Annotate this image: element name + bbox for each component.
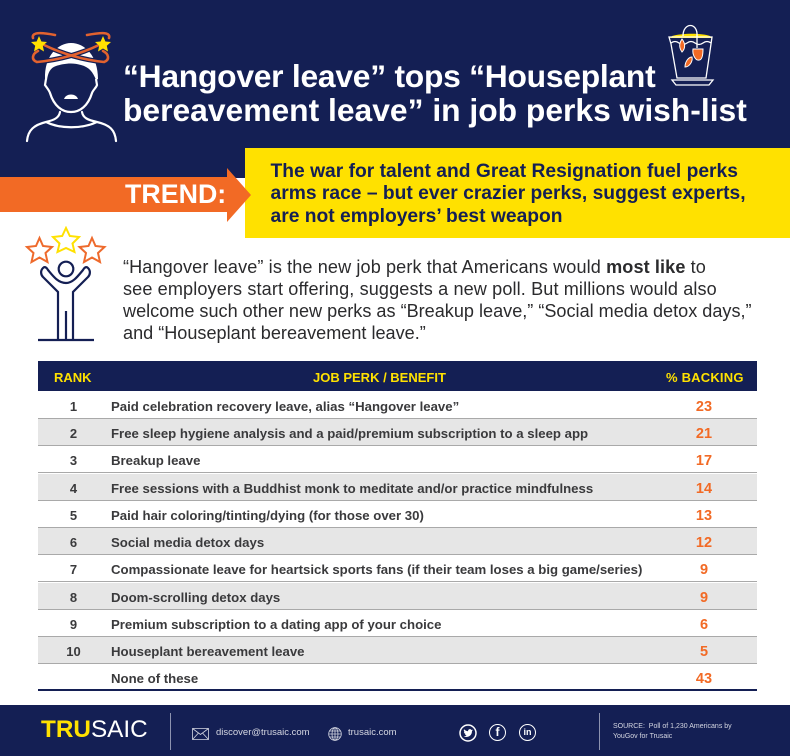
row 9 <box>38 610 757 637</box>
callout text: The war for talent and Great Resignation fuel perks <box>270 160 738 182</box>
title <box>123 58 747 128</box>
row 9: 9 <box>70 617 77 632</box>
row 4: 14 <box>696 480 712 496</box>
callout text: are not employers’ best weapon <box>270 206 563 227</box>
row 5 <box>38 501 757 528</box>
row 8: 9 <box>700 590 708 606</box>
icon: mail <box>192 728 209 740</box>
row 5: 13 <box>696 508 712 524</box>
logo: TRUSAIC <box>41 716 148 743</box>
row none: None of these <box>111 671 198 686</box>
row 8: 8 <box>70 590 77 604</box>
row 2: Free sleep hygiene analysis and a paid/premium subscription to a sleep app <box>111 426 588 441</box>
intro paragraph: see employers start offering, suggests a new poll. But millions would also <box>123 279 717 299</box>
trend label: TREND: <box>125 179 226 209</box>
row 2: 21 <box>696 426 712 442</box>
row 10: 10 <box>66 644 81 659</box>
header band <box>0 0 790 178</box>
table header: RANK <box>54 370 92 385</box>
row 1: 23 <box>696 399 712 415</box>
row 6: 12 <box>696 535 712 551</box>
row 7: 7 <box>70 562 77 577</box>
icon: twitter <box>459 724 477 742</box>
source <box>613 722 732 740</box>
row 7: Compassionate leave for heartsick sports fans (if their team loses a big game/series) <box>111 562 642 577</box>
callout text: arms race – but ever crazier perks, suggest experts, <box>270 183 746 204</box>
row 10 <box>38 637 757 664</box>
source: SOURCE: Poll of 1,230 Americans by <box>613 723 732 730</box>
row 1 <box>38 392 757 419</box>
table header: % BACKING <box>666 370 744 385</box>
icon: linkedin: in <box>524 727 532 737</box>
table header <box>38 361 757 391</box>
title: “Hangover leave” tops “Houseplant <box>123 58 655 94</box>
icon: linkedin <box>519 724 536 741</box>
row 6: Social media detox days <box>111 535 264 550</box>
row 10: Houseplant bereavement leave <box>111 644 304 659</box>
source: YouGov for Trusaic <box>613 733 672 740</box>
intro paragraph: welcome such other new perks as “Breakup leave,” “Social media detox days,” <box>123 301 752 321</box>
icon: person with stars <box>24 226 107 342</box>
intro paragraph: “Hangover leave” is the new job perk that Americans would most like to <box>123 257 706 277</box>
row 8: Doom-scrolling detox days <box>111 590 280 604</box>
row 4: Free sessions with a Buddhist monk to meditate and/or practice mindfulness <box>111 480 593 496</box>
row 4 <box>38 474 757 500</box>
row 9: Premium subscription to a dating app of your choice <box>111 617 441 632</box>
icon: dizzy person <box>26 32 118 142</box>
row 10: 5 <box>700 644 708 660</box>
row 5: Paid hair coloring/tinting/dying (for those over 30) <box>111 508 424 523</box>
row 7 <box>38 555 757 582</box>
table <box>38 361 757 691</box>
intro paragraph <box>123 257 752 343</box>
footer <box>0 705 790 756</box>
row 8 <box>38 582 757 610</box>
row 1: Paid celebration recovery leave, alias “Hangover leave” <box>111 399 459 414</box>
callout text <box>270 160 746 227</box>
icon: facebook <box>489 724 506 741</box>
trend callout <box>245 148 790 238</box>
row 9: 6 <box>700 617 708 633</box>
icon: globe <box>328 727 342 741</box>
website: trusaic.com <box>348 727 397 738</box>
row 6: 6 <box>70 535 77 550</box>
email: discover@trusaic.com <box>216 727 310 738</box>
row 1: 1 <box>70 399 77 414</box>
row 3 <box>38 446 757 473</box>
row none <box>38 664 757 691</box>
row 2 <box>38 419 757 446</box>
row 6 <box>38 528 757 555</box>
row 5: 5 <box>70 508 77 523</box>
row 3: Breakup leave <box>111 453 200 468</box>
icon: facebook: f <box>496 725 500 739</box>
icon: houseplant pot <box>668 24 714 86</box>
intro paragraph: and “Houseplant bereavement leave.” <box>123 323 426 343</box>
row 2: 2 <box>70 426 77 441</box>
row 3: 17 <box>696 453 712 469</box>
trend arrow <box>0 168 251 222</box>
table header: JOB PERK / BENEFIT <box>313 370 446 385</box>
row 7: 9 <box>700 562 708 578</box>
row 3: 3 <box>70 453 77 468</box>
row none: 43 <box>696 671 712 687</box>
title: bereavement leave” in job perks wish-list <box>123 92 747 128</box>
row 4: 4 <box>70 480 77 496</box>
